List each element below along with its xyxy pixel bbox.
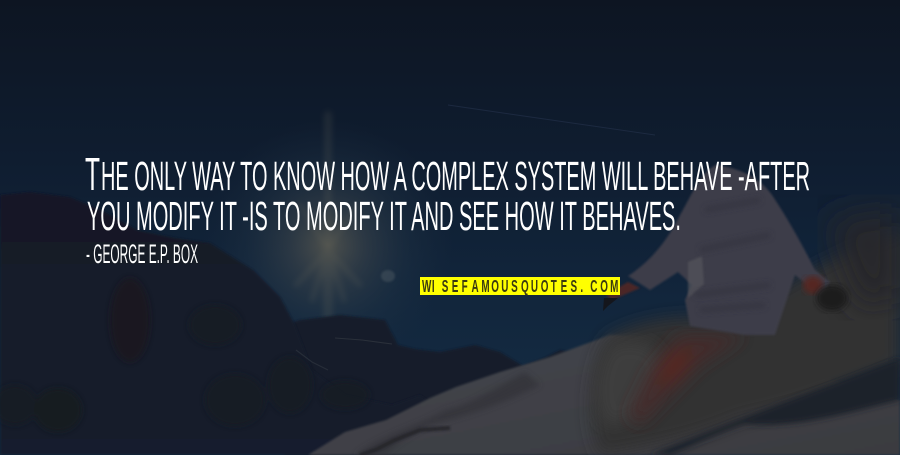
snow spray [591, 205, 900, 455]
quote text: - GEORGE E.P. BOX [86, 239, 198, 269]
red snow tint [628, 335, 745, 425]
watermark badge: WISEFAMOUSQUOTES.COM [422, 277, 618, 297]
quote line 1: T [85, 148, 100, 200]
main mountain, left [0, 192, 440, 455]
dark tracks, lower right [650, 358, 900, 455]
faint contrail [448, 105, 655, 135]
far ridge [285, 315, 590, 455]
sun glow and rays [203, 115, 453, 370]
snow slope, foreground [308, 335, 900, 455]
skier [603, 165, 848, 335]
quote text [85, 148, 810, 269]
